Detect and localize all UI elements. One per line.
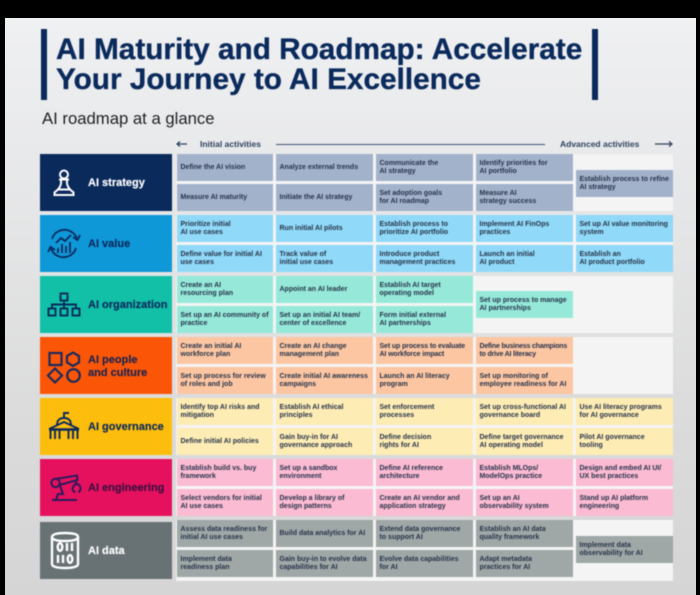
cell: AI use cases — [180, 229, 223, 236]
cell: operating model — [380, 290, 434, 297]
cell — [376, 215, 473, 242]
cell — [376, 428, 473, 455]
cell: Create an AI change — [280, 343, 347, 350]
cell: Define business champions — [480, 343, 567, 350]
panel: AI organization — [40, 276, 172, 333]
cell: Build data analytics for AI — [280, 530, 365, 537]
cell: employee readiness for AI — [480, 381, 566, 388]
panel: AI value: AI value — [88, 238, 130, 250]
panel: AI engineering — [40, 459, 172, 516]
cell: architecture — [380, 473, 420, 480]
cell — [276, 428, 373, 455]
cell — [177, 398, 273, 425]
cell — [476, 291, 573, 318]
title left bar — [41, 29, 47, 100]
cell: processes — [380, 412, 414, 419]
cell: prioritize AI portfolio — [380, 229, 448, 236]
cell: application strategy — [380, 503, 446, 510]
cell: initial use cases — [280, 259, 333, 266]
cell: management practices — [380, 259, 455, 266]
cell: Set adoption goals — [380, 190, 442, 197]
title: AI Maturity and Roadmap: Accelerate — [56, 33, 582, 66]
cell — [177, 428, 273, 455]
cell: Set up an AI — [480, 495, 520, 502]
cell: observability system — [480, 503, 549, 510]
cell — [177, 215, 273, 242]
cell: Pilot AI governance — [580, 434, 645, 441]
cell: management plan — [280, 351, 339, 358]
cell: Prioritize initial — [180, 221, 231, 228]
cell — [177, 245, 273, 272]
cell: to support AI — [380, 534, 423, 541]
row: AI organization — [39, 275, 673, 334]
cell: Define the AI vision — [180, 164, 245, 171]
cell: quality framework — [480, 534, 539, 541]
cell: Establish process to refine — [580, 176, 669, 183]
cell: Introduce product — [380, 251, 439, 258]
subtitle: AI roadmap at a glance — [42, 108, 215, 128]
cell — [376, 306, 473, 333]
cell — [276, 367, 373, 394]
cell — [376, 276, 473, 303]
cell: for AI — [380, 564, 398, 571]
cell: practices — [480, 229, 510, 236]
panel: AI people and culture: AI people — [88, 354, 138, 366]
cell: AI operating model — [480, 442, 543, 449]
cell — [576, 536, 673, 563]
cell: Identify priorities for — [480, 160, 548, 167]
panel: AI strategy — [40, 154, 172, 211]
cell — [476, 154, 573, 181]
cell: Define initial AI policies — [180, 438, 259, 445]
cell: mitigation — [180, 412, 214, 419]
cell — [476, 428, 573, 455]
cell — [376, 398, 473, 425]
cell — [576, 170, 673, 197]
cell — [376, 520, 473, 547]
cell: AI use cases — [180, 503, 223, 510]
cell: Implement data — [580, 542, 631, 549]
icon: data cylinder — [50, 531, 80, 570]
cell — [576, 215, 673, 242]
cell — [177, 367, 273, 394]
icon: value cycle chart — [46, 228, 82, 259]
panel: AI strategy: AI strategy — [88, 177, 145, 189]
cell: Create initial AI awareness — [280, 373, 368, 380]
cell: Establish MLOps/ — [480, 465, 538, 472]
cell: Track value of — [280, 251, 326, 258]
cell: AI product — [480, 259, 514, 266]
cell: framework — [180, 473, 216, 480]
row: AI governance — [39, 397, 674, 456]
cell — [276, 215, 373, 242]
label: initial activities: Initial activities — [200, 139, 261, 149]
icon: org chart — [46, 292, 82, 318]
cell — [276, 154, 373, 181]
cell: environment — [280, 473, 322, 480]
cell: Set up monitoring of — [480, 373, 548, 380]
cell: for AI roadmap — [380, 198, 429, 205]
cell — [376, 184, 473, 211]
cell: tooling — [580, 442, 603, 449]
cell — [476, 245, 573, 272]
cell — [576, 245, 673, 272]
cell — [276, 550, 373, 577]
cell: Launch an AI literacy — [380, 373, 450, 380]
cell: AI partnerships — [380, 320, 431, 327]
panel: AI governance: AI governance — [88, 421, 164, 433]
arrow: advanced — [654, 140, 674, 148]
cell: practice — [180, 320, 207, 327]
cell: program — [380, 381, 408, 388]
cell — [476, 550, 573, 577]
cell: Implement data — [180, 556, 232, 563]
cell: Evolve data capabilities — [380, 556, 458, 563]
cell: resourcing plan — [180, 290, 233, 297]
cell: design patterns — [280, 503, 332, 510]
row: AI people and culture — [39, 336, 673, 395]
icon: robot arm — [50, 474, 82, 502]
cell — [177, 154, 273, 181]
cell: AI partnerships — [480, 305, 531, 312]
cell: AI product portfolio — [580, 259, 645, 266]
cell — [276, 276, 373, 303]
cell — [376, 245, 473, 272]
arrow: initial — [176, 140, 188, 148]
cell — [177, 520, 273, 547]
cell — [177, 489, 273, 516]
cell: Set up process for review — [180, 373, 266, 380]
panel: AI people and culture — [40, 337, 172, 394]
cell: UX best practices — [580, 473, 638, 480]
panel: AI organization: AI organization — [88, 299, 167, 311]
cell: system — [580, 229, 604, 236]
row: AI value — [39, 214, 674, 273]
cell: workforce plan — [180, 351, 230, 358]
cell — [376, 550, 473, 577]
cell — [476, 459, 573, 486]
cell: Develop a library of — [280, 495, 344, 502]
cell: strategy success — [480, 198, 536, 205]
cell — [376, 367, 473, 394]
cell: Create an AI vendor and — [380, 495, 460, 502]
cell — [177, 306, 273, 333]
cell: Set up an initial AI team/ — [280, 312, 360, 319]
cell: Launch an initial — [480, 251, 535, 258]
cell: Define decision — [380, 434, 431, 441]
cell — [276, 184, 373, 211]
cell — [376, 337, 473, 364]
activities axis header — [176, 139, 674, 149]
cell: Define AI reference — [380, 465, 443, 472]
cell — [376, 459, 473, 486]
cell: Establish AI target — [380, 282, 441, 289]
cell: Implement AI FinOps — [480, 221, 549, 228]
title — [56, 33, 582, 96]
row: AI strategy — [39, 153, 674, 212]
cell — [476, 367, 573, 394]
panel: AI value — [40, 215, 172, 272]
cell: Assess data readiness for — [180, 526, 267, 533]
cell: Appoint an AI leader — [280, 286, 347, 293]
cell — [576, 489, 673, 516]
cell: Establish build vs. buy — [180, 465, 256, 472]
panel: AI governance — [40, 398, 172, 455]
cell: Establish an AI data — [480, 526, 546, 533]
cell — [177, 337, 273, 364]
cell: Set up process to manage — [480, 297, 567, 304]
title right bar — [592, 29, 598, 100]
cell: readiness plan — [180, 564, 230, 571]
cell — [576, 459, 673, 486]
cell — [476, 520, 573, 547]
cell: AI workforce impact — [380, 351, 444, 358]
cell: Create an AI — [180, 282, 221, 289]
cell: governance approach — [280, 442, 352, 449]
cell: AI portfolio — [480, 168, 517, 175]
cell: Set up an AI community of — [180, 312, 269, 319]
cell — [576, 428, 673, 455]
cell: practices for AI — [480, 564, 530, 571]
cell — [476, 337, 573, 364]
cell: Establish an — [580, 251, 621, 258]
cell: Design and embed AI UI/ — [580, 465, 661, 472]
panel: AI data — [40, 522, 172, 579]
cell: capabilities for AI — [280, 564, 338, 571]
cell — [476, 215, 573, 242]
title: Your Journey to AI Excellence — [56, 63, 481, 96]
cell: center of excellence — [280, 320, 346, 327]
cell: AI strategy — [380, 168, 416, 175]
cell — [476, 184, 573, 211]
cell: rights for AI — [380, 442, 419, 449]
cell — [376, 489, 473, 516]
cell — [276, 489, 373, 516]
cell — [476, 398, 573, 425]
cell: Measure AI — [480, 190, 517, 197]
label: advanced activities: Advanced activities — [560, 139, 639, 149]
cell: Establish AI ethical — [280, 404, 343, 411]
cell: Gain buy-in for AI — [280, 434, 338, 441]
panel: AI engineering: AI engineering — [88, 482, 164, 494]
cell: Stand up AI platform — [580, 495, 648, 502]
cell: use cases — [180, 259, 214, 266]
cell: Set up process to evaluate — [380, 343, 465, 350]
cell: ModelOps practice — [480, 473, 542, 480]
cell: to drive AI literacy — [480, 351, 536, 358]
cell: Set up AI value monitoring — [580, 221, 668, 228]
cell: Select vendors for initial — [180, 495, 262, 502]
cell: Form initial external — [380, 312, 446, 319]
cell: Adapt metadata — [480, 556, 532, 563]
cell — [476, 489, 573, 516]
cell — [276, 398, 373, 425]
row: AI data — [39, 520, 674, 582]
panel: AI data: AI data — [88, 545, 125, 557]
cell: Use AI literacy programs — [580, 404, 662, 411]
cell: for AI governance — [580, 412, 639, 419]
cell: Gain buy-in to evolve data — [280, 556, 367, 563]
cell: initial AI use cases — [180, 534, 243, 541]
cell: principles — [280, 412, 313, 419]
cell — [276, 306, 373, 333]
cell — [276, 337, 373, 364]
cell — [276, 245, 373, 272]
cell: campaigns — [280, 381, 316, 388]
cell — [177, 184, 273, 211]
cell: Define value for initial AI — [180, 251, 262, 258]
icon: government building — [48, 411, 80, 440]
cell: Set up a sandbox — [280, 465, 337, 472]
cell — [177, 276, 273, 303]
cell — [576, 398, 673, 425]
icon: chess pawn — [52, 168, 76, 197]
cell: engineering — [580, 503, 619, 510]
cell — [177, 550, 273, 577]
cell: Extend data governance — [380, 526, 460, 533]
cell: Initiate the AI strategy — [280, 194, 352, 201]
icon: shapes — [46, 350, 82, 384]
cell: AI strategy — [580, 184, 616, 191]
cell: Set enforcement — [380, 404, 434, 411]
cell: Create an initial AI — [180, 343, 241, 350]
cell: Establish process to — [380, 221, 448, 228]
cell: Measure AI maturity — [180, 194, 247, 201]
cell — [177, 459, 273, 486]
cell: Run initial AI pilots — [280, 225, 343, 232]
cell: Communicate the — [380, 160, 438, 167]
cell — [376, 154, 473, 181]
panel: AI people and culture: and culture — [88, 366, 147, 378]
cell — [276, 520, 373, 547]
cell: Analyze external trends — [280, 164, 358, 171]
cell: Define target governance — [480, 434, 564, 441]
cell: Set up cross-functional AI — [480, 404, 566, 411]
cell: Identify top AI risks and — [180, 404, 260, 411]
cell: of roles and job — [180, 381, 233, 388]
cell — [276, 459, 373, 486]
cell: observability for AI — [580, 550, 643, 557]
row: AI engineering — [39, 458, 674, 517]
cell: governance board — [480, 412, 540, 419]
